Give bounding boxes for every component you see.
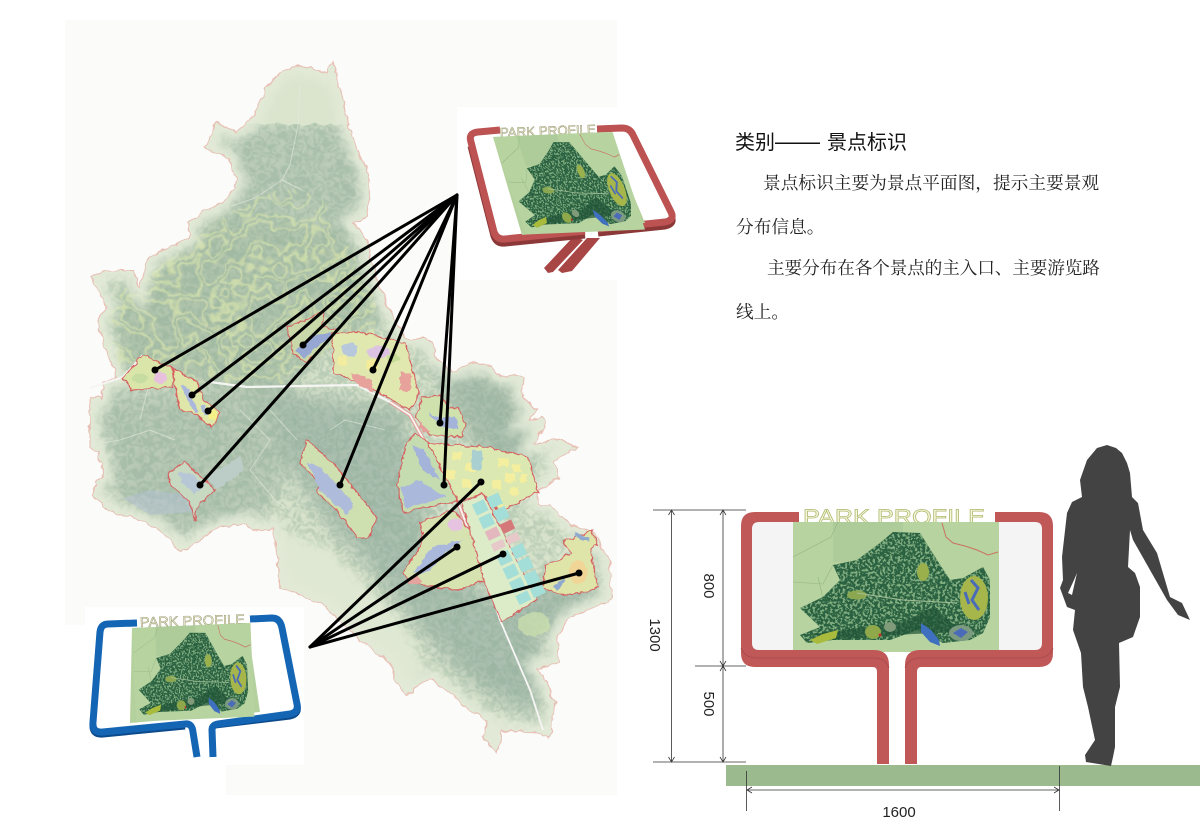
- description text: 主要分布在各个景点的主入口、主要游览路: [767, 258, 1100, 278]
- dimension: 1300: 1300: [646, 618, 663, 652]
- dimension: 1600: 1600: [882, 804, 916, 821]
- minor roads: [90, 85, 385, 510]
- grid blocks: [472, 492, 546, 605]
- site: south-west: [168, 457, 244, 522]
- site: central north: [332, 332, 419, 410]
- location dots: [152, 342, 582, 576]
- site: wetland: [397, 433, 458, 513]
- frame shadow: [93, 706, 297, 734]
- planning sites: [123, 310, 598, 636]
- frame right: [905, 512, 1053, 764]
- site map: [80, 55, 620, 755]
- frame shadow: [471, 146, 672, 243]
- leader lines from blue sign: [310, 482, 579, 647]
- description text: 分布信息。: [736, 217, 824, 237]
- site: industrial grid: [462, 493, 537, 622]
- site: west valley: [173, 368, 220, 427]
- leader lines from top sign: [155, 195, 457, 485]
- sign title: PARK PROFILE: [803, 506, 985, 529]
- site: lake: [300, 440, 377, 538]
- sign stems: [544, 236, 600, 273]
- heading: ——: [775, 129, 820, 154]
- description text: 景点标识主要为景点平面图，提示主要景观: [763, 173, 1099, 193]
- map base region: [80, 55, 620, 755]
- dimension: 800: 800: [700, 573, 717, 599]
- frame: [470, 128, 672, 239]
- ground strip: [726, 765, 1200, 786]
- description text: [736, 173, 1100, 322]
- sign title: PARK PROFILE: [140, 611, 245, 630]
- human silhouette: [1060, 445, 1190, 766]
- sign map: [493, 132, 645, 235]
- map outline: [90, 62, 612, 753]
- pale edge fringe: [90, 62, 612, 753]
- heading: 景点标识: [827, 131, 907, 154]
- dimension lines: [653, 510, 1060, 811]
- heading: 类别: [735, 131, 775, 154]
- description text: 线上。: [736, 302, 789, 322]
- site: south-west resort: [403, 510, 485, 590]
- sign map: [793, 522, 999, 652]
- arm gap: [1068, 573, 1077, 595]
- panel backing: [752, 522, 1042, 650]
- frame depth lines: [741, 648, 1053, 668]
- road centre: [390, 402, 543, 730]
- site: west entrance: [123, 355, 173, 390]
- sign title: PARK PROFILE: [500, 122, 596, 140]
- sign: red perspective view: [470, 122, 672, 273]
- dimension: 500: 500: [700, 691, 717, 717]
- secondary water wash: [123, 490, 195, 515]
- site: east fields: [428, 443, 538, 512]
- sign: blue perspective view: [93, 611, 297, 757]
- pale south bulge: [281, 534, 428, 680]
- frame left: [741, 512, 889, 764]
- sign: front elevation: [741, 506, 1053, 764]
- map backdrop: [65, 20, 617, 795]
- frame: [93, 618, 297, 757]
- sign map: [130, 623, 260, 723]
- white backing: blue sign: [85, 607, 304, 765]
- south patch: [518, 612, 550, 636]
- site: north pond: [287, 310, 337, 363]
- site: hillside: [415, 395, 465, 437]
- main road: [90, 355, 390, 402]
- road shoulder: [390, 402, 485, 580]
- white backing: top sign: [457, 107, 681, 280]
- site: far east: [542, 530, 598, 595]
